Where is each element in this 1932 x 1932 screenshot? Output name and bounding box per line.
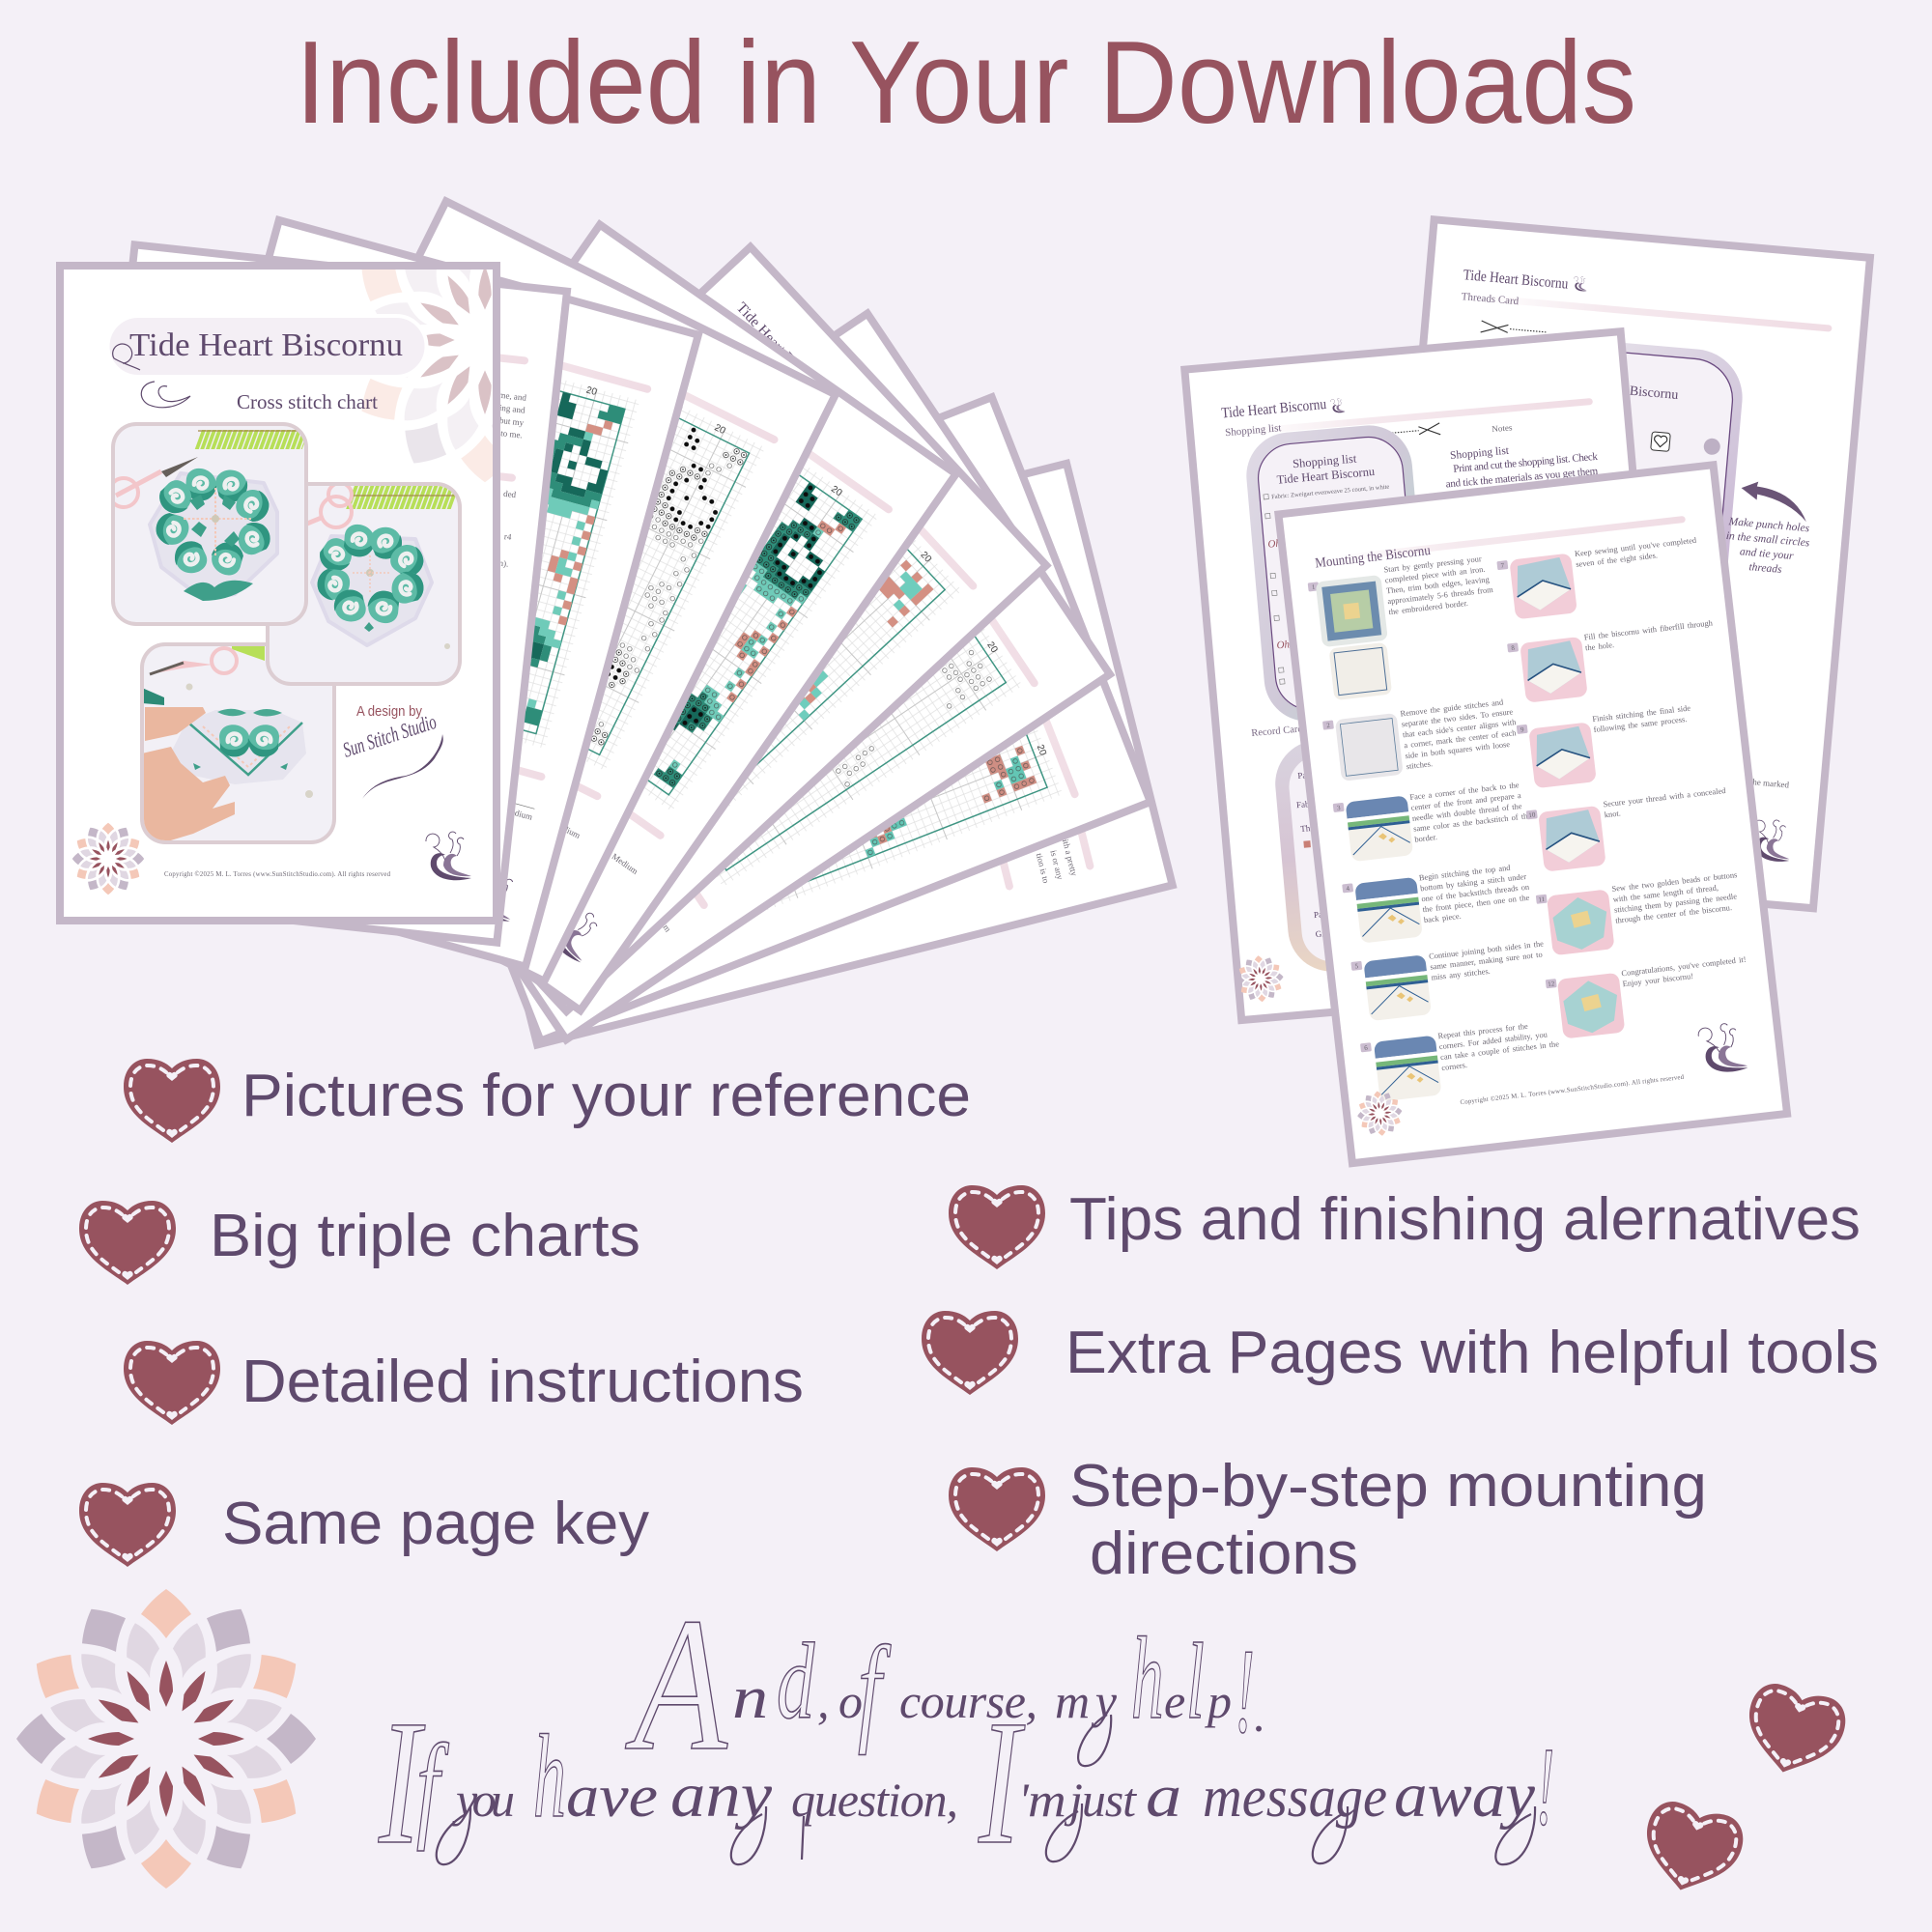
shopping list notes: and tick the materials as you get them (1445, 466, 1599, 490)
step 4: one of the backstitch threads on (1421, 883, 1530, 903)
step 6: can take a couple of stitches in the (1440, 1039, 1560, 1062)
script message: you (451, 1773, 515, 1827)
script message: f (416, 1719, 449, 1852)
script message: p (1205, 1674, 1232, 1728)
bullet: step-by-step mounting directions: Step-by-step mounting (1069, 1453, 1707, 1520)
step 1: Start by gently pressing your (1383, 554, 1482, 574)
page C: black and white symbol chart: Medium (552, 818, 582, 840)
step 11: Sew the two golden beads or buttons (1611, 870, 1738, 894)
shopping list page: Record Card (1251, 724, 1304, 739)
bullet: same page key (79, 1483, 649, 1567)
script message: e (1164, 1674, 1185, 1728)
title: Included in Your Downloads (296, 16, 1636, 148)
script message: just (1064, 1773, 1137, 1827)
threads card (1539, 338, 1747, 662)
threads card: Biscornu (1629, 384, 1679, 403)
page copyright: Copyright ©2025 M. L. Torres (www.SunStitchStudio.com). All rights reserved (1460, 1074, 1685, 1106)
step 10: Secure your thread with a concealed (1603, 786, 1727, 809)
script message: course, (899, 1674, 1037, 1728)
step 4 (1342, 862, 1534, 945)
step 2 (1322, 696, 1521, 782)
script message: d (777, 1621, 815, 1741)
page A: introduction text page: me, and (498, 390, 527, 403)
step 3: border. (1414, 833, 1437, 844)
step 11: stitching them by passing the needle (1614, 892, 1738, 915)
cover title: Tide Heart Biscornu (129, 327, 403, 363)
step 1: the embroidered border. (1388, 599, 1468, 616)
step 2: that each side's center aligns with (1403, 718, 1518, 739)
bullet: extra pages with helpful tools: Extra Pages with helpful tools (1065, 1320, 1879, 1386)
shopping list card: Tide Heart Biscornu (1276, 465, 1376, 487)
mounting the biscornu page (1278, 465, 1787, 1163)
punch holes note: Make punch holes (1727, 516, 1810, 534)
step 2: separate the two sides. To ensure (1401, 707, 1514, 728)
bullet: extra pages with helpful tools (922, 1311, 1879, 1395)
script message: n (732, 1664, 768, 1731)
wave icon (426, 832, 471, 880)
shopping list card: Shopping list (1292, 451, 1357, 470)
script message: h (1131, 1613, 1164, 1744)
scissors (1481, 321, 1547, 338)
large mandala logo (16, 1589, 316, 1889)
page B: full colour block chart: 20 (584, 384, 599, 398)
bullet: same page key: Same page key (222, 1491, 649, 1557)
shopping list page: Notes (1492, 422, 1513, 434)
a design by: A design by (356, 703, 422, 720)
cover page (56, 262, 500, 924)
script message: I (378, 1683, 426, 1882)
faded cover mandala (361, 270, 493, 482)
punch holes note (1723, 516, 1812, 578)
shopping list card: Oh (1276, 639, 1291, 651)
bullet: big triple charts (79, 1201, 640, 1285)
threads card page: Threads Card (1461, 291, 1520, 307)
bullet: tips and finishing alernatives: Tips and finishing alernatives (1069, 1186, 1861, 1253)
shopping list card (1243, 422, 1434, 725)
step 7: seven of the eight sides. (1576, 551, 1658, 569)
step 12 (1546, 955, 1752, 1040)
script message: question, (791, 1773, 958, 1827)
page A: introduction text page: ded (503, 489, 517, 499)
script message: l (1186, 1622, 1205, 1741)
threads card page: Tide Heart Biscornu (1463, 267, 1569, 293)
page E: colour block chart: Tide Heart Biscornu (733, 299, 828, 400)
cover subtitle: Cross stitch chart (237, 390, 378, 413)
shopping list page (1183, 331, 1678, 1020)
page G: colour symbol chart (382, 397, 1151, 1041)
page A: introduction text page: r4 (503, 531, 512, 542)
script message: a (1146, 1763, 1181, 1830)
record card: Pattern (1314, 908, 1339, 920)
page H: intro page: tion is to (1035, 852, 1051, 885)
script message: h (533, 1712, 566, 1842)
bullet: pictures for your reference: Pictures for your reference (242, 1063, 971, 1129)
page A: introduction text page: to me. (500, 428, 523, 440)
photo 2: biscornu from above (266, 482, 462, 686)
script message: ! (1235, 1625, 1255, 1758)
step 9: Finish stitching the final side (1592, 704, 1691, 724)
step 10: 10 (1528, 810, 1536, 819)
fan of chart pages (60, 198, 1173, 1044)
script message: my (1055, 1674, 1118, 1728)
page mandala (1355, 1089, 1405, 1138)
threads card page (1378, 219, 1870, 908)
script message: any (670, 1760, 773, 1831)
page E: colour block chart (270, 247, 1046, 1011)
step 6 (1360, 1018, 1563, 1103)
step 1: approximately 5-6 threads from (1387, 585, 1494, 606)
signature (340, 709, 443, 799)
punch holes note: in the small circles (1725, 530, 1810, 550)
shopping list notes: Shopping list (1450, 445, 1510, 462)
script message: ' (1018, 1773, 1030, 1827)
decorative heart upper right (1736, 1679, 1851, 1784)
step 3: needle with double thread of the (1411, 802, 1522, 823)
title pill (108, 316, 427, 377)
signature: Sun Stitch Studio (340, 709, 440, 762)
script message: ! (1536, 1725, 1554, 1848)
photo 3: biscornu in hand (140, 642, 336, 844)
bullet: pictures for your reference (124, 1059, 971, 1143)
punch holes note: threads (1748, 561, 1782, 576)
script message: message (1203, 1765, 1387, 1829)
bullet: step-by-step mounting directions: directions (1090, 1520, 1358, 1587)
step 1: 1 (1312, 583, 1316, 591)
page F: white symbol chart (324, 314, 1110, 1039)
record card: Gifted to (1315, 926, 1348, 939)
step 12: Congratulations, you've completed it! (1621, 955, 1747, 978)
page A: introduction text page: n). (498, 558, 509, 569)
threads card page: the marked (1750, 777, 1790, 790)
step 1: completed piece with an iron. (1384, 565, 1486, 584)
record card: Threads (1300, 821, 1329, 834)
step 11 (1536, 870, 1744, 956)
scissors (1391, 423, 1440, 439)
step 1: Then, trim both edges, leaving (1386, 575, 1491, 595)
page H: intro page (432, 464, 1173, 1044)
page A: introduction text page: ing and (498, 403, 526, 415)
step 8: 8 (1511, 644, 1516, 652)
step 5: miss any stitches. (1431, 967, 1491, 982)
shopping list notes: Print and cut the shopping list. Check (1453, 451, 1599, 475)
step 3: 3 (1337, 804, 1341, 812)
copyright: Copyright ©2025 M. L. Torres (www.SunStitchStudio.com). All rights reserved (164, 871, 391, 878)
step 11: through the center of the biscornu. (1615, 903, 1732, 925)
photo 1: biscornu top view (109, 422, 308, 626)
step 7: Keep sewing until you've completed (1575, 536, 1697, 558)
arrow (1739, 480, 1809, 522)
shopping list card: Oh (1267, 538, 1282, 551)
shopping list notes (1443, 438, 1600, 490)
page A: introduction text page (65, 244, 567, 943)
decorative heart lower right (1634, 1797, 1748, 1902)
step 6: corners. (1441, 1061, 1467, 1072)
script message: o (838, 1674, 863, 1728)
record card: Pattern (1297, 769, 1323, 781)
page E: colour block chart: 20 (918, 550, 933, 565)
page H: intro page: with a pretty (1059, 832, 1079, 877)
step 3 (1332, 780, 1534, 864)
shopping list card: Fabric: Zweigart evenweave 25 count, in white (1271, 484, 1390, 500)
page B: full colour block chart: Medium (502, 805, 533, 822)
step 3: Face a corner of the back to the (1409, 781, 1520, 802)
page G: colour symbol chart: 20 (1035, 743, 1048, 757)
step 8 (1507, 618, 1719, 704)
step 10: knot. (1604, 809, 1621, 819)
bullet: detailed instructions: Detailed instructions (242, 1349, 804, 1415)
script message: m (1028, 1774, 1066, 1827)
step 2: side in both squares with loose (1405, 740, 1511, 760)
page D: colour plus symbol spiral chart: 20 (829, 484, 844, 499)
page D: colour plus symbol spiral chart (224, 225, 956, 1010)
step 1 (1307, 554, 1504, 702)
step 5: 5 (1354, 962, 1359, 971)
script message: away (1394, 1760, 1536, 1831)
page D: colour plus symbol spiral chart: Medium (611, 851, 639, 876)
step 5: same manner, making sure not to (1430, 951, 1543, 972)
step 8: the hole. (1585, 640, 1615, 652)
step 2: a corner, mark the center of each (1404, 728, 1518, 750)
shopping list page: Tide Heart Biscornu (1221, 396, 1327, 421)
step 3: same color as the backstitch of the (1413, 811, 1532, 834)
bullet: tips and finishing alernatives (949, 1185, 1861, 1269)
step 3: center of the front and prepare a (1410, 791, 1521, 812)
step 9 (1517, 704, 1697, 790)
step 8: Fill the biscornu with fiberfill through (1583, 618, 1714, 641)
record card: Fabric (1296, 798, 1319, 810)
step 5 (1350, 939, 1550, 1023)
script message: , (817, 1674, 829, 1728)
script message: A (625, 1577, 728, 1790)
flourish (113, 344, 190, 408)
step 4: back piece. (1423, 912, 1462, 924)
step 6: 6 (1364, 1044, 1369, 1052)
step 4: 4 (1346, 885, 1350, 893)
extra pages group (1183, 219, 1870, 1163)
bullet: big triple charts: Big triple charts (210, 1203, 640, 1269)
step 7 (1496, 536, 1704, 621)
page wave icon (1697, 1022, 1748, 1075)
script message: . (1254, 1688, 1265, 1742)
step 9: 9 (1520, 725, 1524, 734)
page F: white symbol chart: 20 (984, 640, 1000, 655)
bullet: step-by-step mounting directions (949, 1453, 1707, 1587)
step 4: the front piece, then one on the (1422, 894, 1530, 914)
small cover mandala (72, 823, 144, 895)
step 12: 12 (1548, 980, 1555, 988)
page E: colour block chart: Medium (627, 863, 655, 892)
page C: black and white symbol chart: 20 (713, 422, 727, 437)
page C: black and white symbol chart (155, 201, 836, 981)
page G: colour symbol chart: Medium (649, 928, 669, 959)
script message: f (858, 1623, 892, 1756)
script message (378, 1577, 1554, 1882)
step 4: bottom by taking a stitch under (1420, 872, 1527, 893)
mounting the biscornu page: Mounting the Biscornu (1315, 543, 1432, 571)
step 5: Continue joining both sides in the (1429, 939, 1545, 961)
page B: full colour block chart (106, 220, 698, 967)
page F: white symbol chart: Medium (648, 904, 673, 934)
shopping list page: Shopping list (1225, 422, 1282, 439)
bullet: detailed instructions (124, 1341, 804, 1425)
step 6: Repeat this process for the (1437, 1022, 1528, 1040)
step 6: corners. For added stability, you (1438, 1030, 1548, 1051)
step 11: with the same length of thread, (1612, 883, 1719, 904)
step 7: 7 (1500, 561, 1505, 570)
page H: intro page: is or any (1048, 849, 1065, 881)
punch holes note: and tie your (1740, 546, 1794, 562)
page A: introduction text page: but my (498, 415, 525, 428)
step 11: 11 (1538, 895, 1546, 904)
step 2: Remove the guide stitches and (1400, 697, 1504, 719)
step 10 (1526, 786, 1733, 873)
step 2: stitches. (1406, 759, 1433, 771)
step 12: Enjoy your biscornu! (1622, 972, 1693, 988)
step 9: following the same process. (1593, 715, 1688, 734)
script message: I (978, 1683, 1026, 1882)
step 4: Begin stitching the top and (1418, 864, 1512, 882)
step 2: 2 (1326, 722, 1331, 729)
record card (1271, 729, 1465, 975)
script message: ave (566, 1764, 658, 1830)
